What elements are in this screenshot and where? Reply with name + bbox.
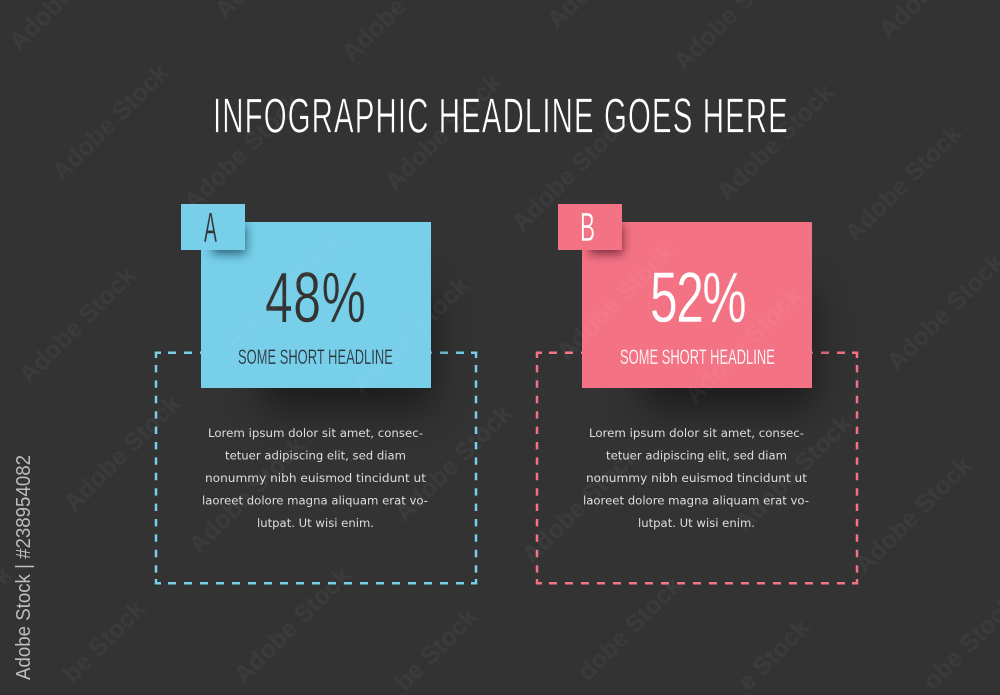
- watermark pattern: Adobe Stock: [183, 431, 311, 559]
- body text A: lutpat. Ut wisi enim.: [257, 517, 374, 530]
- value 52%: 52%: [650, 258, 747, 337]
- watermark pattern: e Stock: [732, 613, 815, 695]
- body text A: laoreet dolore magna aliquam erat vo-: [202, 494, 428, 508]
- watermark pattern: Adobe Stock: [679, 281, 807, 409]
- body text B: Lorem ipsum dolor sit amet, consec-: [589, 427, 804, 440]
- watermark pattern: dobe Stock: [572, 571, 688, 686]
- body text B: tetuer adipiscing elit, sed diam: [606, 450, 787, 462]
- watermark pattern: Adobe Stock: [389, 399, 517, 527]
- body text B: [583, 427, 809, 530]
- dashed frame B: [537, 353, 857, 583]
- watermark pattern: Adobe Stock: [551, 238, 679, 366]
- body text A: Lorem ipsum dolor sit amet, consec-: [208, 427, 423, 440]
- watermark pattern: Adobe Stock: [839, 119, 967, 247]
- short headline B: SOME SHORT HEADLINE: [620, 345, 775, 369]
- body text A: tetuer adipiscing elit, sed diam: [225, 450, 406, 462]
- tag shadow A: [212, 225, 246, 254]
- body text B: lutpat. Ut wisi enim.: [638, 517, 755, 530]
- watermark pattern: Adobe Stock: [46, 58, 174, 186]
- stock id label: Adobe Stock | #238954082: [13, 455, 35, 680]
- watermark pattern: Adobe Stock: [849, 451, 977, 579]
- watermark pattern: Adobe Stock: [178, 88, 306, 216]
- watermark pattern: Adobe Stock: [729, 409, 857, 537]
- body text A: nonummy nibh euismod tincidunt ut: [205, 472, 427, 485]
- tag A: [181, 204, 245, 250]
- card shadow B: [643, 290, 813, 408]
- tag shadow B: [589, 225, 623, 254]
- watermark pattern: Adobe Stock: [13, 261, 141, 389]
- body text A: [202, 427, 428, 530]
- watermark pattern: Adobe Stock: [506, 109, 634, 237]
- panel: option A: A: [204, 204, 217, 252]
- short headline A: SOME SHORT HEADLINE: [238, 345, 393, 369]
- body text B: laoreet dolore magna aliquam erat vo-: [583, 494, 809, 508]
- tag B: [558, 204, 622, 250]
- watermark pattern: Adobe Stock: [379, 68, 507, 196]
- card B: [582, 222, 812, 388]
- watermark pattern: Adobe Stock: [516, 441, 644, 569]
- title: INFOGRAPHIC HEADLINE GOES HERE: [213, 88, 788, 143]
- watermark pattern: Adobe Stock: [228, 561, 356, 689]
- dashed frame A: [156, 353, 476, 583]
- watermark pattern: be Stock: [389, 603, 483, 695]
- card A: [201, 222, 431, 388]
- letter B: B: [580, 204, 595, 250]
- card shadow A: [262, 290, 432, 408]
- panel: option B: [537, 204, 857, 583]
- watermark pattern: Adobe Stock: [218, 226, 346, 354]
- value 48%: 48%: [265, 258, 366, 337]
- watermark pattern: Adobe Stock: [58, 389, 186, 517]
- body text B: nonummy nibh euismod tincidunt ut: [586, 472, 808, 485]
- watermark pattern: be Stock: [57, 595, 151, 688]
- panel: option A: [156, 204, 476, 583]
- watermark pattern: Adobe Stock: [346, 271, 474, 399]
- watermark pattern: Adobe Stock: [711, 78, 839, 206]
